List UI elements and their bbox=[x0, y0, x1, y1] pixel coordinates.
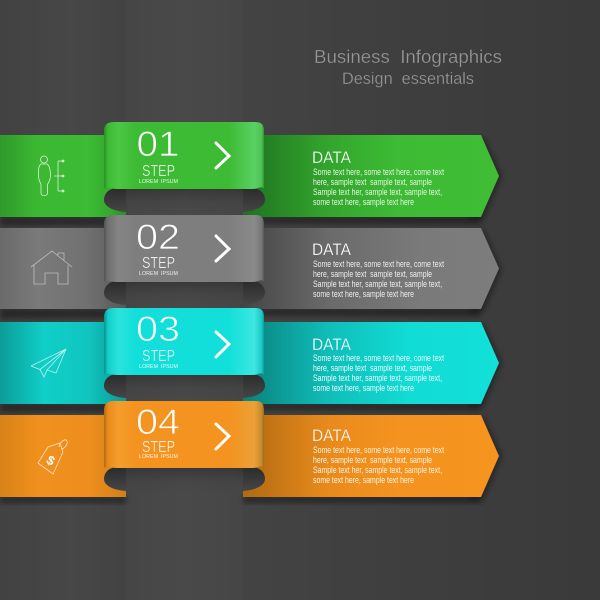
data text: here, sample text sample text, sample bbox=[313, 363, 432, 373]
icon: price tag: $ bbox=[44, 452, 58, 469]
step 1 band: green bbox=[0, 135, 502, 226]
step number: 01 bbox=[136, 125, 180, 164]
data text: some text here, sample text here bbox=[313, 383, 414, 393]
step 3 card: teal: 03 bbox=[136, 310, 180, 349]
data text: Sample text her, sample text, sample text, bbox=[313, 187, 442, 197]
data text: DATA bbox=[312, 426, 352, 445]
data text: Some text here, some text here, come text bbox=[313, 259, 444, 269]
data text bbox=[312, 148, 444, 207]
step 2 card: gray: STEP bbox=[142, 255, 175, 272]
arrow band bbox=[243, 135, 499, 217]
step 1 card: green: STEP bbox=[142, 163, 175, 180]
icon: person with branches bbox=[38, 156, 64, 196]
title bbox=[314, 46, 502, 88]
step 1 card: green bbox=[104, 122, 265, 215]
step 4 card: orange: LOREM IPSUM bbox=[139, 454, 178, 460]
data text bbox=[312, 335, 444, 393]
icon: paper plane bbox=[31, 349, 66, 377]
step 3 band: teal bbox=[0, 322, 502, 412]
arrow: chevron bbox=[216, 332, 229, 357]
data text: Some text here, some text here, come text bbox=[313, 167, 444, 177]
arrow: chevron bbox=[216, 143, 229, 168]
step 2 card: gray: 02 bbox=[136, 218, 180, 257]
data text: Sample text her, sample text, sample text, bbox=[313, 465, 442, 475]
data text bbox=[312, 240, 444, 299]
step 4 card: orange: STEP bbox=[142, 439, 175, 456]
data text: Some text here, some text here, come text bbox=[313, 445, 444, 455]
data text: Some text here, some text here, come text bbox=[313, 353, 444, 363]
data text: DATA bbox=[312, 148, 352, 167]
ribbon bbox=[104, 401, 264, 468]
title: Design essentials bbox=[342, 70, 474, 88]
arrow: chevron bbox=[216, 236, 229, 261]
ribbon bbox=[104, 122, 264, 189]
step 3 card: teal: LOREM IPSUM bbox=[139, 364, 178, 370]
curl bbox=[104, 188, 265, 212]
step 2 band: gray bbox=[0, 228, 502, 319]
step 3 card: teal: STEP bbox=[142, 348, 175, 365]
icon: price tag bbox=[38, 440, 67, 474]
step 3 card: teal bbox=[104, 308, 265, 401]
data text: here, sample text sample text, sample bbox=[313, 269, 432, 279]
step 2 card: gray bbox=[104, 215, 265, 308]
step 4 band: orange bbox=[0, 415, 502, 503]
left band bbox=[0, 135, 126, 217]
data text: DATA bbox=[312, 335, 352, 354]
ribbon bbox=[104, 215, 264, 282]
icon: house bbox=[31, 251, 72, 284]
data text: here, sample text sample text, sample bbox=[313, 455, 432, 465]
data text: some text here, sample text here bbox=[313, 197, 414, 207]
data text: here, sample text sample text, sample bbox=[313, 177, 432, 187]
data text: some text here, sample text here bbox=[313, 289, 414, 299]
arrow: chevron bbox=[216, 424, 229, 449]
data text: Sample text her, sample text, sample text, bbox=[313, 279, 442, 289]
step 4 card: orange: 04 bbox=[136, 403, 180, 442]
data text: some text here, sample text here bbox=[313, 475, 414, 485]
ribbon bbox=[104, 308, 264, 375]
title: Business Infographics bbox=[314, 46, 502, 67]
data text: Sample text her, sample text, sample text, bbox=[313, 373, 442, 383]
central column bbox=[126, 0, 243, 600]
data text: DATA bbox=[312, 240, 352, 259]
data text bbox=[312, 426, 444, 485]
step 2 card: gray: LOREM IPSUM bbox=[139, 271, 178, 277]
step 1 card: green: LOREM IPSUM bbox=[139, 179, 178, 185]
step 4 card: orange bbox=[104, 401, 265, 494]
